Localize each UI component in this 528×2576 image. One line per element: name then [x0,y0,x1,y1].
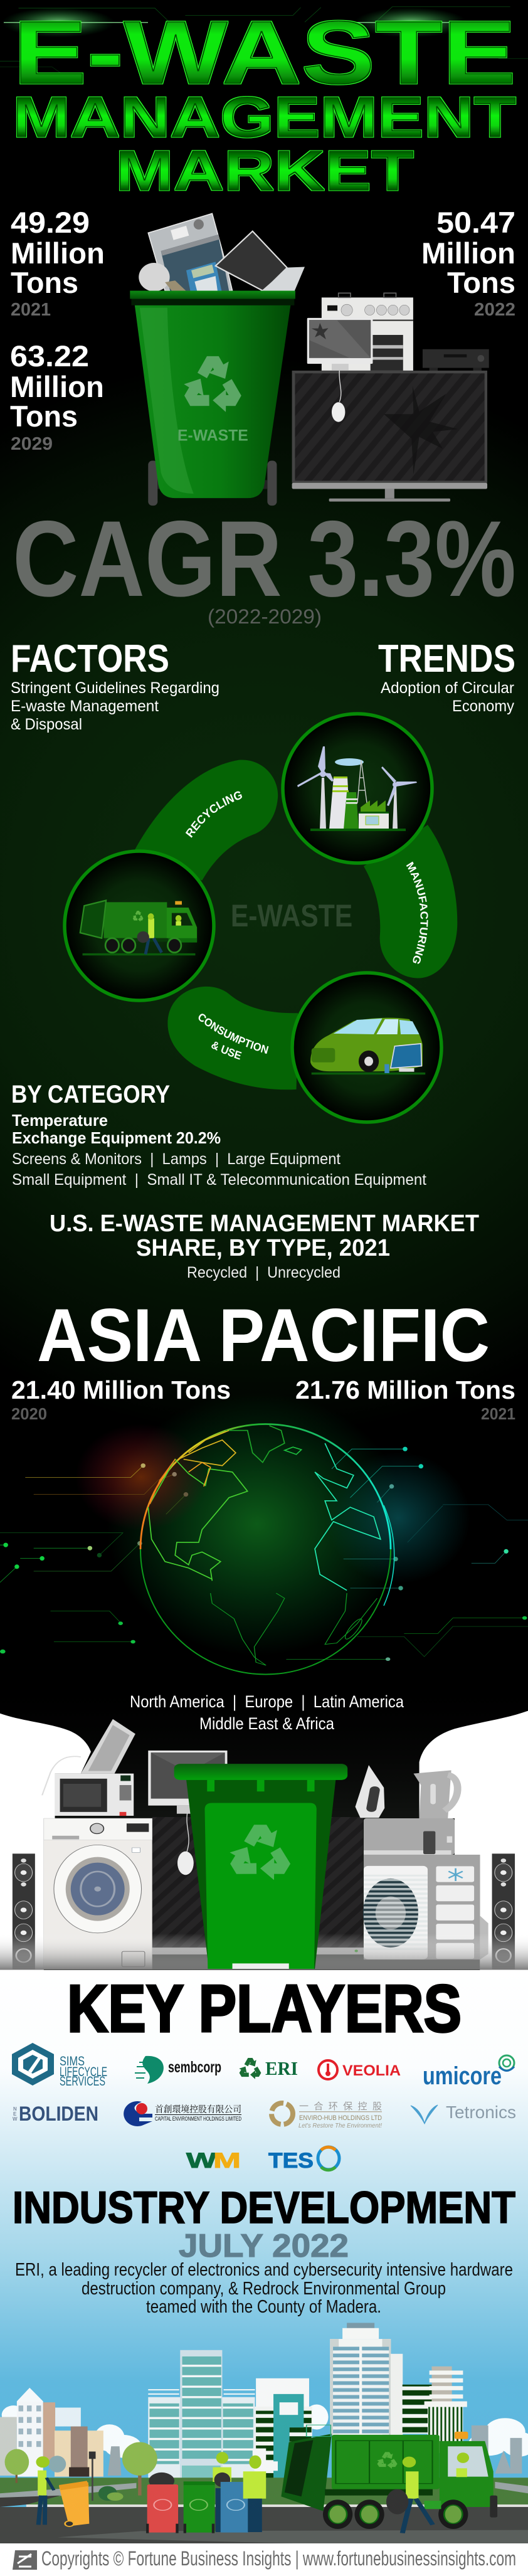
regional list: North America | Europe | Latin America [130,1692,404,1711]
logo: New Boliden: W [13,2116,18,2122]
yellow bin with worker [36,2456,89,2526]
trends: Adoption of Circular [381,679,514,697]
logo: Enviro-Hub Holdings: Let's Restore The Environment! [298,2123,382,2129]
stat: 2021 [11,206,105,320]
Asia Pacific heading: ASIA PACIFIC [37,1293,490,1377]
CAGR years: (2022-2029) [208,605,322,628]
iron [356,1765,384,1818]
factors [11,637,219,733]
cracked television [292,371,487,502]
by category: Exchange Equipment 20.2% [12,1128,221,1147]
trees and lamp [5,2442,157,2501]
bin label: E-WASTE [177,427,248,445]
speaker right [492,1853,515,1969]
amplifier [423,349,489,371]
factors: & Disposal [11,716,82,733]
stat: 2021: 49.29 [11,206,90,239]
factors: E-waste Management [11,697,159,715]
by category: Temperature [12,1111,108,1130]
bin lid [130,290,295,305]
title [13,3,516,203]
center label: E-WASTE [231,898,352,933]
logo: Tetronics [411,2102,516,2124]
continents lower [211,1593,377,1665]
logo: Sims Lifecycle Services: LIFECYCLE [60,2065,107,2079]
stat: 2029 [10,339,104,454]
large recycling bin [174,1764,347,1969]
tall white tower [330,2323,403,2436]
Asia Pacific 2021: 21.76 Million Tons [295,1375,515,1404]
US market share: U.S. E-WASTE MANAGEMENT MARKET [50,1211,479,1237]
kettle [413,1770,458,1818]
cracked monitor [307,318,372,371]
light sky gradient section [0,1970,528,2543]
bin body [135,305,290,498]
green bin [184,2481,215,2533]
Asia Pacific 2020 [11,1375,231,1423]
back building with balconies [253,2378,312,2484]
truck crew [386,2452,469,2533]
band: recycling [135,760,278,881]
logo: Tetronics: Tetronics [446,2102,516,2122]
speaker left [13,1853,35,1969]
title: MARKET [115,140,414,203]
trends: Economy [452,697,514,715]
stat: 2022: Million [421,236,515,270]
stat: 2029: 2029 [11,434,53,454]
Asia Pacific 2020: 21.40 Million Tons [11,1375,231,1404]
oven in bin [148,213,233,290]
car [310,1018,425,1074]
circle: manufacturing wind and factory [283,714,432,863]
logo: Sims Lifecycle Services [12,2043,107,2089]
circle: recycling truck [65,851,214,1000]
circuit lines behind title [0,7,528,75]
development text: destruction company, & Redrock Environmental Group [82,2279,446,2299]
logo: ERI [238,2057,298,2080]
US market share: Recycled | Unrecycled [187,1264,341,1281]
development text [15,2260,513,2317]
wheels [148,461,277,506]
logo: Capital Environment Holdings: 首創環境控股有限公司 [155,2104,241,2115]
blue bin with two workers [213,2452,266,2533]
footer logo [13,2550,37,2570]
band: recycling: RECYCLING [186,792,242,838]
wind turbine left [297,746,334,829]
stat: 2022: Tons [447,266,515,299]
stat: 2021: Million [11,236,105,270]
lifecycle diagram [135,760,458,1090]
city scene [0,2323,528,2543]
stat: 2029: 63.22 [10,339,89,373]
circle: car and monitor [292,973,441,1122]
logo: Sims Lifecycle Services: SIMS [60,2054,85,2069]
stat: 2022 [421,206,515,320]
ground line [310,829,406,831]
stat: 2029: Million [10,370,104,403]
red bin [146,2473,179,2533]
stove [322,293,413,371]
band: consumption and use: CONSUMPTION [198,1014,268,1054]
band: manufacturing: MANUFACTURING [406,862,428,964]
factory [359,800,389,829]
microwave [55,1774,134,1816]
lens flares [2,8,477,38]
continents upper [148,1426,381,1591]
logo: TES: TES [268,2149,314,2173]
light bulb [139,263,186,292]
title: E-WASTE [13,3,516,103]
regional list [130,1692,404,1733]
logo: Enviro-Hub Holdings: 一 合 环 保 控 股 [299,2101,382,2112]
factors: Stringent Guidelines Regarding [11,679,219,697]
logo: Sembcorp [135,2056,221,2084]
wind sock and pylon [335,758,367,803]
left buildings [0,2388,121,2477]
washing machine [44,1818,152,1969]
by category: Screens & Monitors | Lamps | Large Equipment [12,1150,341,1168]
mouse [332,371,345,422]
by category: BY CATEGORY [11,1081,170,1108]
logo: Veolia: VEOLIA [342,2062,401,2079]
development text: teamed with the County of Madera. [146,2297,381,2317]
wind turbine right [381,766,417,829]
logo: Umicore: umicore [423,2062,502,2090]
Asia Pacific 2021 [295,1375,515,1423]
logo: WM: M [213,2149,241,2173]
globe [140,1424,394,1675]
stat: 2021: 2021 [11,300,51,320]
by category [11,1081,426,1189]
lower circuit lines [0,1611,528,1661]
logo: WM: W [186,2149,217,2173]
title: MANAGEMENT [13,86,516,149]
cooling towers [329,777,359,829]
white corner shapes [0,1711,528,1972]
logo: New Boliden: BOLIDEN [19,2102,98,2125]
distant skyline right [472,2425,522,2474]
grass [0,2478,528,2504]
logo: ERI: ERI [265,2057,298,2079]
garbage truck [281,2425,497,2529]
illustration: e-waste bin with appliances [130,213,489,506]
band: consumption and use: & USE [211,1041,242,1060]
monitor [148,1751,227,1814]
US market share: SHARE, BY TYPE, 2021 [136,1235,390,1261]
teal tower [148,2350,255,2484]
television behind bin [152,1817,371,1954]
fade to dark panel behind appliances [0,1675,528,1863]
laptop [216,231,305,290]
logo: Veolia [319,2060,401,2079]
mouse [177,1813,194,1875]
indoor air conditioner [364,1818,455,1855]
logo: Capital Environment Holdings [124,2101,241,2126]
logo: WM [186,2149,241,2173]
floor shadow [0,1934,528,1970]
stat: 2022: 50.47 [436,206,515,239]
key players heading: KEY PLAYERS [67,1971,462,2046]
right green building [403,2367,467,2453]
clouds [2,2405,528,2458]
trends [378,637,515,715]
logo: Capital Environment Holdings: CAPITAL ENVIRONMENT HOLDINGS LIMITED [155,2116,241,2122]
keyboard [42,1719,135,1795]
regional list: Middle East & Africa [199,1714,335,1733]
logo: Enviro-Hub Holdings: ENVIRO-HUB HOLDINGS LTD [299,2114,382,2122]
logo: New Boliden: N [13,2106,17,2112]
stat: 2029: Tons [10,400,78,433]
stat: 2021: Tons [11,266,78,299]
logo: TES [268,2147,339,2173]
by category: Small Equipment | Small IT & Telecommunication Equipment [12,1171,426,1189]
logo: Enviro-Hub Holdings [272,2101,382,2129]
band: manufacturing [364,825,458,978]
band: consumption and use [167,986,298,1090]
streets [0,2482,528,2543]
factors: FACTORS [11,637,169,681]
circuit lines left and right of globe [0,1447,528,1591]
US market share [50,1211,479,1281]
stat: 2022: 2022 [474,300,515,320]
date: JULY 2022 [179,2228,349,2264]
logo: Sims Lifecycle Services: SERVICES [60,2074,105,2089]
truck [80,900,197,955]
footer [0,2543,528,2576]
recycling symbol [179,356,246,415]
logo: New Boliden: E [13,2111,17,2117]
Asia Pacific 2020: 2020 [11,1404,47,1423]
outdoor air conditioner [363,1855,488,1959]
appliances scene [0,1719,528,1970]
calculator [186,262,221,290]
dark green radial glow background [0,188,528,1505]
Asia Pacific 2021: 2021 [481,1404,515,1423]
logo: Sembcorp: sembcorp [168,2059,221,2076]
globe glows [75,1392,470,1656]
